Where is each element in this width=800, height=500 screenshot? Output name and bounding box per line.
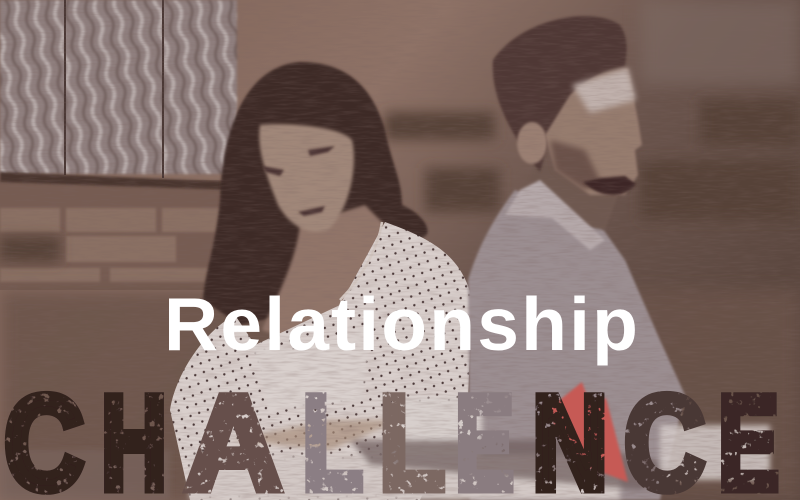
distressed word: CHALLENGE — [4, 369, 779, 500]
woman — [170, 62, 472, 500]
title: Relationship — [164, 282, 638, 366]
man face — [545, 68, 642, 195]
man collar — [505, 180, 605, 250]
man neck — [530, 160, 620, 230]
woman face — [259, 124, 354, 232]
metal panel window — [0, 0, 237, 190]
man ear — [517, 122, 547, 164]
lower photo highlights — [0, 398, 770, 500]
red splash — [550, 382, 628, 482]
woman blouse — [170, 222, 472, 500]
man beard — [583, 176, 636, 195]
woman neck and chest — [262, 205, 385, 340]
necklace — [340, 222, 382, 300]
man jaw shadow — [550, 140, 600, 190]
man jacket — [468, 190, 685, 500]
woman top — [252, 322, 372, 410]
man hair — [493, 16, 627, 172]
man forehead highlight — [572, 68, 636, 113]
man — [468, 16, 685, 500]
woman hair — [203, 62, 428, 325]
